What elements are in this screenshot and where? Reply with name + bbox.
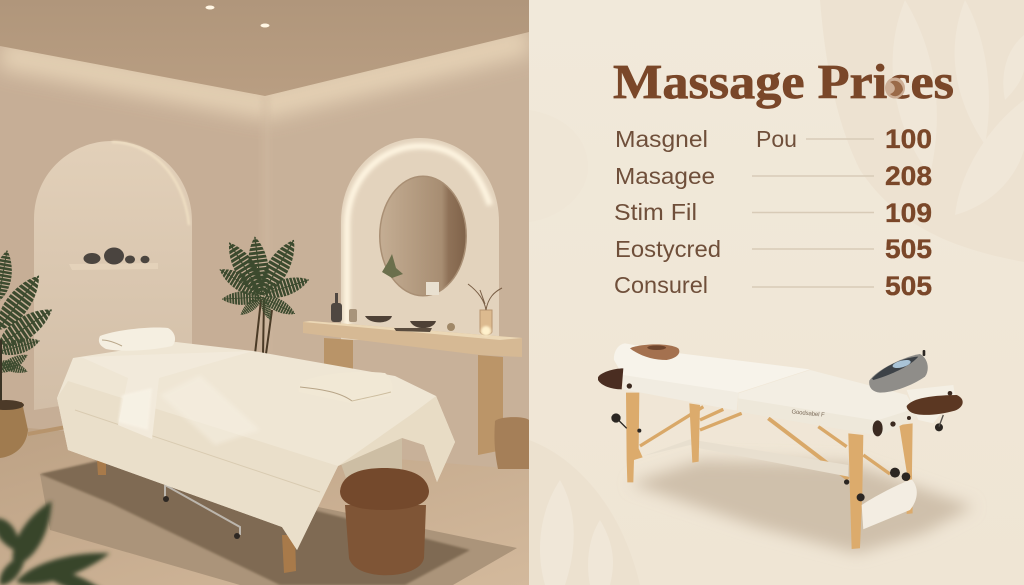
price row 5: 505: [885, 271, 932, 301]
towel: folded at head: [99, 327, 175, 351]
price row 5: [614, 271, 932, 301]
room: wood basket: [494, 417, 529, 469]
table lower shelf: [643, 439, 848, 477]
towel: folded on bed: [299, 372, 393, 403]
decoration: leaf pattern top right: [820, 0, 1024, 262]
table rolled support: [862, 479, 917, 529]
room: oval mirror: [379, 176, 467, 296]
price row 4: 505: [885, 234, 932, 264]
massage bed with sheet: [57, 342, 455, 550]
room: floor: [0, 428, 529, 585]
room: ceiling lights: [206, 6, 270, 28]
table padded top left: [614, 343, 810, 411]
price row 1: 100: [885, 124, 932, 154]
price row 5: Consurel: [614, 272, 708, 298]
decoration: faint circle left: [529, 110, 588, 222]
table rivets: [627, 383, 952, 436]
price row 2: [615, 161, 932, 191]
room: cove light glow: [0, 40, 529, 104]
table control device: [869, 350, 928, 393]
price row 3: Stim Fil: [614, 199, 697, 225]
room: corner light strip: [260, 96, 271, 356]
plant: potted palm left: [0, 250, 52, 458]
room: right wall: [265, 32, 529, 470]
table floor shadow: [630, 460, 973, 553]
room: ceiling: [0, 0, 529, 96]
title stain detail: [885, 78, 905, 98]
massage bed legs: [96, 438, 402, 573]
plant: blurred foreground leaves: [0, 495, 113, 585]
price row 4: [615, 234, 932, 264]
table right arm rest: [907, 395, 963, 415]
panel: price list: [529, 0, 1024, 585]
table left arm rest: [598, 368, 623, 389]
table knobs: [611, 413, 943, 501]
table back legs and braces: [640, 407, 890, 479]
price row 1: Masgnel: [615, 126, 708, 152]
room: console decor: [331, 284, 502, 336]
table face cradle: [630, 344, 679, 360]
room: rug: [40, 458, 517, 585]
decoration: leaf pattern bottom left: [529, 440, 640, 585]
price row 2: Masagee: [615, 163, 715, 189]
room: left wall arch niche: [34, 141, 192, 410]
price row 1: Pou: [756, 126, 797, 152]
table legs: [626, 393, 913, 549]
plant: corner palm: [219, 237, 309, 354]
panel: spa room photo: [0, 0, 529, 585]
price row 3: [614, 198, 932, 228]
room: glowing mirror arch: [341, 138, 499, 340]
product: portable massage table: [598, 343, 973, 553]
stool: [340, 468, 429, 575]
room: shelf with stones: [69, 248, 158, 270]
table brand text: Goodsabel F: [791, 409, 825, 419]
price row 3: 109: [885, 198, 932, 228]
title: Massage Prices: [613, 54, 954, 109]
room: left wall: [0, 46, 265, 460]
room: console table: [303, 321, 522, 455]
price row 2: 208: [885, 161, 932, 191]
table padded top right: [738, 370, 955, 436]
price row 4: Eostycred: [615, 236, 721, 262]
price row 1: [615, 124, 932, 154]
room: skirting: [28, 425, 66, 436]
